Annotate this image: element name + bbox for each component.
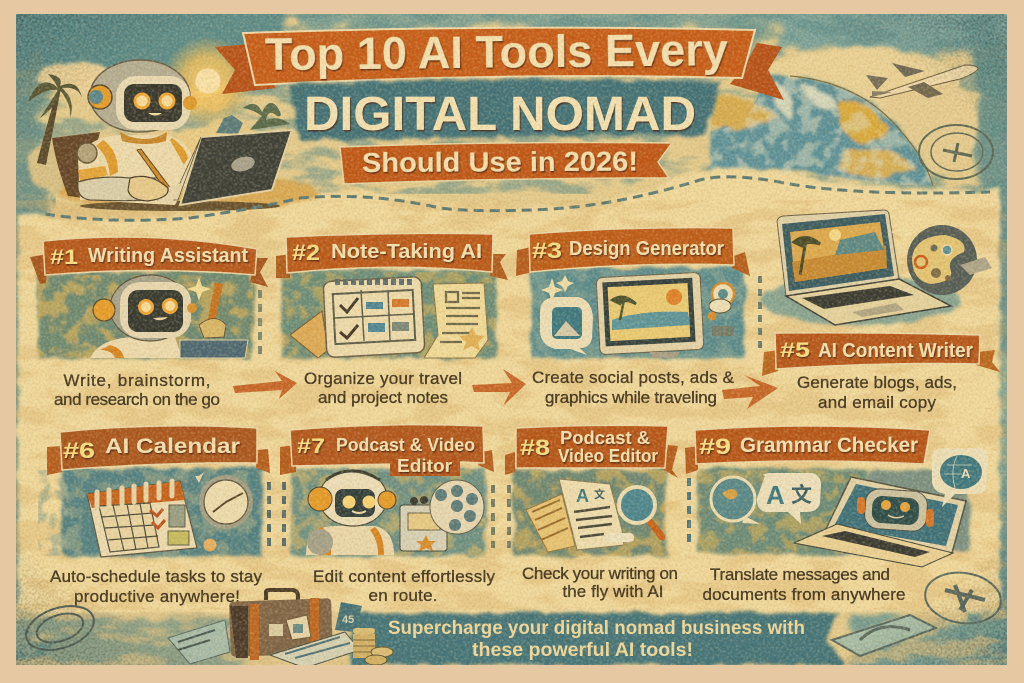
parchment stains (16, 200, 1007, 610)
panel: #9 Grammar Checker: A (766, 480, 785, 510)
description #7: en route. (368, 586, 438, 605)
ribbon (516, 247, 750, 276)
ribbon: #5 AI Content Writer (762, 333, 1000, 376)
sand under robot (60, 174, 320, 210)
ribbon (280, 445, 494, 475)
left map fade (38, 470, 68, 556)
description #1: and research on the go (54, 390, 220, 409)
dashed divider (758, 276, 762, 350)
icon: left postal stamp (21, 598, 99, 658)
panel: #7 Podcast & Video Editor: Editor (397, 455, 452, 476)
panel: #7 Podcast & Video Editor: #7 (297, 435, 325, 458)
laptop base (786, 279, 951, 325)
monitor (596, 272, 704, 355)
palette (907, 225, 977, 295)
globe bubble (711, 477, 755, 521)
ribbon: #5 AI Content Writer: AI Content Writer (818, 340, 973, 362)
title banner: line 3: Should Use in 2026! (362, 146, 638, 178)
panel: #2 Note-Taking AI (276, 233, 508, 358)
description #7 (313, 567, 496, 605)
sparkle (187, 277, 211, 301)
panel: #1 Writing Assistant: Writing Assistant (88, 245, 248, 267)
description #1: Write, brainstorm, (64, 371, 210, 390)
panel: #1 Writing Assistant (30, 237, 268, 358)
illustration: robot with laptop (52, 60, 292, 211)
planner (323, 276, 425, 358)
description #5: and email copy (818, 393, 936, 412)
panel: #8 Podcast & Video Editor: Video Editor (558, 446, 658, 466)
ribbon (685, 446, 698, 474)
sparkles (541, 275, 574, 302)
icon: suitcase (229, 590, 333, 660)
panel: #8 Podcast & Video Editor: #8 (520, 435, 550, 460)
panel: #6 AI Calendar (38, 426, 270, 557)
globe speech bubble (932, 448, 988, 507)
ribbon (30, 254, 268, 287)
description #6 (50, 567, 262, 606)
panel: #9 Grammar Checker: #9 (699, 434, 731, 459)
panel: #7 Podcast & Video Editor (280, 425, 494, 556)
icon: right stamps (832, 568, 1004, 656)
robot head (90, 60, 190, 132)
panel: #8 Podcast & Video Editor: 文 (594, 487, 605, 501)
panel: #9 Grammar Checker: Grammar Checker (740, 434, 918, 457)
description #2: Organize your travel (304, 369, 462, 388)
laptop (180, 340, 248, 358)
calendar (87, 481, 197, 557)
description #3 (532, 368, 735, 407)
panel: #3 Design Generator: #3 (532, 238, 562, 263)
panel: #2 Note-Taking AI: #2 (292, 240, 320, 265)
papers (526, 494, 575, 552)
description #9 (702, 565, 906, 604)
dashed travel route (45, 177, 990, 220)
icon: cash and coins (270, 628, 393, 668)
robot arm (78, 166, 108, 182)
sparkle (891, 220, 917, 244)
description #8: Check your writing on (522, 564, 678, 583)
icon: boarding ticket (168, 620, 230, 664)
media chat icon (540, 297, 593, 355)
laptop (825, 477, 966, 553)
notes page (424, 283, 488, 358)
icon: globe (708, 74, 935, 186)
description #5: Generate blogs, ads, (797, 373, 957, 392)
laptop screen (777, 210, 899, 296)
panel: #9 Grammar Checker: 文 (791, 483, 812, 507)
title banner: line 2: DIGITAL NOMAD (304, 88, 696, 141)
dashed divider (493, 485, 509, 548)
icon: airplane (866, 63, 978, 98)
bottom banner: these powerful AI tools! (472, 640, 693, 661)
cream parchment wave (18, 168, 1000, 612)
bottom banner: Supercharge your digital nomad business with (388, 618, 805, 639)
laptop (180, 130, 292, 205)
arrow 2 (472, 369, 526, 406)
description #8: the fly with AI (562, 582, 664, 601)
panel: #8 Podcast & Video Editor (505, 425, 678, 556)
film reel (430, 480, 484, 534)
sun (162, 36, 254, 128)
panel: #9 Grammar Checker: A (961, 466, 971, 481)
social icons (712, 283, 734, 305)
gripping hand (128, 176, 168, 201)
icon: flight stamp (919, 125, 993, 179)
description #2 (304, 369, 462, 407)
robot shoulder (77, 143, 97, 163)
description #3: graphics while traveling (545, 388, 717, 407)
robot torso (78, 135, 195, 205)
ribbon (505, 445, 678, 478)
panel: #3 Design Generator (516, 228, 750, 358)
description #8 (522, 564, 678, 601)
robot (90, 337, 182, 358)
pencil and hand (205, 282, 223, 337)
description #2: and project notes (318, 388, 448, 407)
title banner: line 1: Top 10 AI Tools Every (265, 24, 728, 80)
divider (687, 478, 691, 548)
panel: #6 AI Calendar: #6 (63, 438, 95, 463)
screen robot (864, 488, 928, 532)
small palms (243, 103, 290, 130)
description #5 (797, 373, 957, 412)
description #3: Create social posts, ads & (532, 368, 735, 387)
small paper (290, 311, 328, 358)
top scene sky (27, 47, 978, 193)
description #6: productive anywhere! (74, 587, 240, 606)
title banner: line 3 (340, 142, 672, 184)
panel: #8 Podcast & Video Editor: A (576, 486, 589, 506)
panel: #1 Writing Assistant: #1 (50, 246, 78, 269)
panel: #6 AI Calendar: AI Calendar (105, 435, 240, 458)
ribbon (47, 446, 270, 475)
description #9: documents from anywhere (702, 585, 906, 604)
description #9: Translate messages and (710, 565, 890, 584)
panel: #4 design laptop with palette (760, 210, 992, 325)
icon: travel tag: 45 (342, 614, 354, 626)
panel: #8 Podcast & Video Editor: Podcast & (560, 428, 650, 448)
description #1 (54, 371, 220, 409)
title banner: line 1 (215, 24, 784, 100)
description #6: Auto-schedule tasks to stay (50, 567, 262, 586)
ribbon: #5 AI Content Writer: #5 (780, 339, 810, 362)
dashed divider (269, 482, 284, 548)
arrow 3 (722, 375, 778, 409)
panel: #3 Design Generator: Design Generator (569, 238, 724, 260)
panel: #2 Note-Taking AI: Note-Taking AI (331, 241, 482, 263)
bottom banner (350, 613, 845, 665)
pencil (137, 149, 172, 192)
robot (306, 526, 394, 555)
clock (199, 475, 253, 529)
description #7: Edit content effortlessly (313, 567, 496, 586)
magnifier (650, 522, 662, 537)
robot hand raised (216, 115, 243, 134)
ribbon (276, 254, 508, 280)
dashed divider (258, 290, 262, 358)
panel: #9 Grammar Checker (685, 426, 988, 567)
editor device (400, 505, 447, 551)
icon: travel tag (335, 602, 362, 632)
palm tree (28, 74, 82, 165)
translate bubble (757, 473, 821, 524)
panel: #7 Podcast & Video Editor: Podcast & Video (336, 434, 475, 455)
star (459, 327, 485, 351)
arrow 1 (233, 371, 297, 399)
